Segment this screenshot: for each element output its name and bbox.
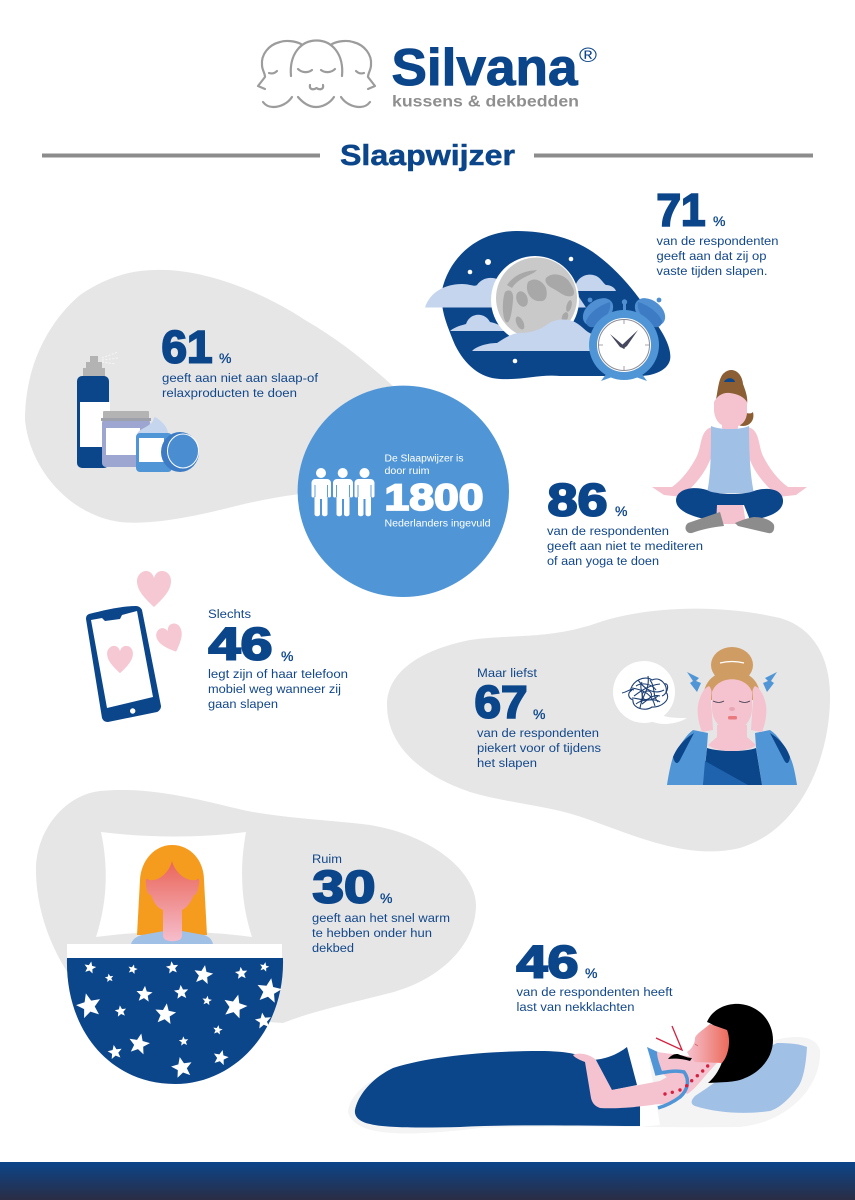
hearts	[107, 571, 188, 673]
face	[146, 861, 199, 941]
hands	[698, 686, 766, 732]
stat: 46 percent phone: gaan slapen	[208, 697, 278, 711]
stat: 46 percent neck: %	[585, 965, 597, 981]
heading: Slaapwijzer: Slaapwijzer	[340, 140, 515, 172]
shoulders	[131, 931, 213, 944]
stat: 30 percent: dekbed	[312, 941, 354, 955]
alarm clock	[578, 292, 670, 381]
stat: 30 percent: %	[380, 890, 392, 906]
stat: 46 percent neck: van de respondenten heeft	[516, 985, 673, 999]
blanket	[67, 958, 283, 1084]
stat: 46 percent phone: 46	[208, 618, 272, 670]
stat: 46 percent phone: mobiel weg wanneer zij	[208, 682, 341, 696]
hair	[715, 370, 747, 404]
stat: 61 percent: geeft aan niet aan slaap-of	[162, 371, 319, 385]
footer bar	[0, 1162, 855, 1200]
jar lid	[161, 432, 199, 472]
stat: 67 percent: 67	[474, 676, 528, 728]
stat: 30 percent: te hebben onder hun	[312, 926, 432, 940]
stat: 71 percent: vaste tijden slapen.	[656, 264, 768, 278]
stat: 46 percent phone: Slechts	[208, 607, 251, 621]
stat: 61 percent: 61	[162, 322, 212, 372]
moon	[491, 256, 579, 344]
tagline: kussens & dekbedden	[392, 94, 579, 110]
stat: 67 percent: van de respondenten	[477, 726, 599, 740]
stat: 67 percent: het slapen	[477, 756, 537, 770]
stat: 67 percent	[474, 666, 601, 770]
illustration: moon and alarm clock	[425, 231, 670, 381]
stat: 71 percent: geeft aan dat zij op	[656, 249, 767, 263]
neck	[708, 725, 756, 751]
illustration: beauty products	[77, 352, 199, 472]
blanket	[355, 1047, 640, 1128]
thought bubble	[613, 661, 687, 724]
feet	[685, 512, 774, 533]
stat: 71 percent: %	[713, 213, 725, 229]
stat: 86 percent: %	[615, 503, 627, 519]
arm	[573, 1054, 687, 1108]
circle text: door ruim	[384, 466, 430, 477]
clouds	[425, 275, 616, 331]
stat: 67 percent: %	[533, 706, 545, 722]
illustration: woman sleeping with neck pain	[348, 1004, 820, 1133]
large jar	[101, 411, 151, 467]
stat: 61 percent: relaxproducten te doen	[162, 386, 297, 400]
circle text: De Slaapwijzer is	[384, 454, 464, 464]
phone	[86, 606, 161, 722]
panel: grey blob right	[387, 609, 830, 851]
illustration: worried woman	[613, 647, 797, 785]
hair	[711, 647, 753, 683]
stat: 30 percent: 30	[312, 862, 376, 912]
stat: 46 percent neck: last van nekklachten	[516, 1000, 634, 1014]
stat: 86 percent: of aan yoga te doen	[547, 554, 659, 568]
icon: three sleeping heads	[258, 40, 375, 107]
stat: 71 percent: van de respondenten	[656, 234, 778, 248]
lightning bolts	[687, 672, 777, 692]
illustration: phone with hearts	[86, 571, 188, 722]
circle text: 1800	[384, 477, 484, 518]
illustration: woman meditating	[652, 370, 807, 533]
white sheet	[627, 1047, 660, 1127]
panel: grey blob bottom left	[36, 790, 476, 1023]
cream jar	[136, 417, 172, 472]
foreground cloud	[472, 320, 600, 351]
blanket stars	[74, 960, 283, 1079]
panel: 1800 respondents circle	[298, 386, 509, 597]
stat: 71 percent: 71	[656, 184, 706, 236]
arms	[652, 427, 807, 497]
stat: 86 percent: geeft aan niet te mediteren	[547, 539, 703, 553]
circle text	[384, 454, 490, 530]
pain dots	[663, 1064, 709, 1096]
stars	[468, 257, 573, 363]
blanket fold	[67, 944, 282, 959]
chest and neck	[657, 1052, 717, 1094]
circle text: Nederlanders ingevuld	[384, 518, 490, 530]
heading: Slaapwijzer	[42, 140, 813, 172]
stat: 46 percent phone: %	[281, 648, 293, 664]
pillow	[692, 1043, 807, 1113]
spray can	[77, 352, 118, 468]
stat: 86 percent	[547, 474, 703, 568]
stat: 67 percent: piekert voor of tijdens	[477, 741, 601, 755]
stat: 46 percent phone	[208, 607, 348, 711]
night sky blob	[442, 231, 670, 379]
panel: grey blob left	[25, 270, 400, 523]
jacket	[667, 730, 797, 785]
pain arrow	[656, 1026, 682, 1050]
stat: 30 percent	[312, 852, 450, 955]
stat: 46 percent phone: legt zijn of haar telefoon	[208, 667, 348, 681]
hair strand	[668, 1054, 692, 1061]
stat: 86 percent: 86	[548, 474, 608, 526]
face and neck	[714, 393, 747, 430]
registered mark: ®	[579, 45, 597, 67]
stat: 71 percent	[656, 184, 778, 278]
pillow	[96, 832, 252, 937]
face	[687, 1024, 729, 1063]
stat: 67 percent: Maar liefst	[477, 666, 538, 680]
top	[707, 426, 754, 493]
top	[703, 748, 762, 785]
stat: 86 percent: van de respondenten	[547, 524, 669, 538]
garment strap	[655, 1071, 687, 1108]
stat: 61 percent: %	[219, 350, 231, 366]
brand name: Silvana	[392, 39, 579, 97]
stat: 30 percent: Ruim	[312, 852, 342, 866]
illustration: woman in bed with star blanket	[67, 832, 283, 1084]
legs	[676, 488, 783, 521]
face	[712, 679, 752, 731]
hair	[137, 845, 207, 935]
stat: 46 percent neck	[516, 936, 673, 1014]
stat: 30 percent: geeft aan het snel warm	[312, 911, 450, 925]
faint bed shape	[348, 1037, 820, 1133]
icon: three people	[312, 468, 374, 516]
logo	[258, 39, 597, 110]
hair	[707, 1004, 773, 1083]
stat: 46 percent neck: 46	[516, 936, 578, 988]
hair band	[724, 378, 735, 382]
stat: 61 percent	[162, 322, 319, 400]
blue garment	[647, 1047, 674, 1074]
